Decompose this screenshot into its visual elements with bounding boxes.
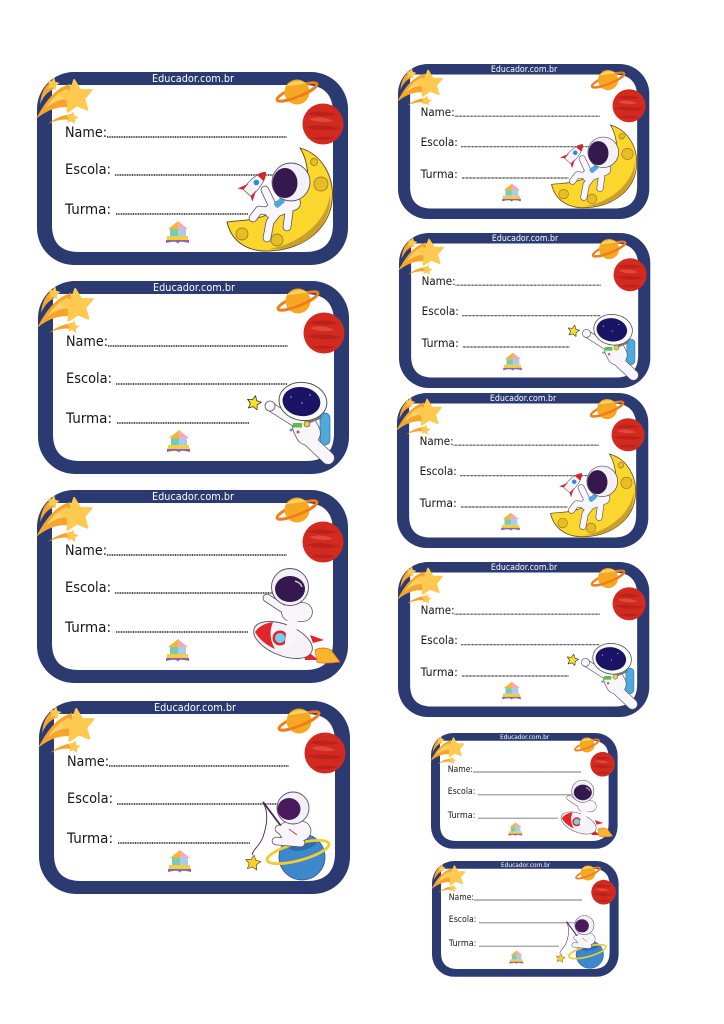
label card 6: star astronaut, medium [398, 233, 650, 388]
header: Educador.com.br [152, 73, 235, 85]
illustration: astronaut reaching for star [566, 641, 634, 704]
illustration: astronaut on moon [551, 454, 636, 537]
label card 9: rocket astronaut, small [430, 733, 618, 849]
field: class: Turma: [448, 939, 476, 949]
field: name: Name: [422, 274, 456, 288]
header: Educador.com.br [501, 862, 551, 869]
field: school: Escola: [65, 580, 111, 596]
icon: logo [508, 822, 522, 836]
illustration: astronaut reaching for star [567, 312, 635, 375]
field: class: Turma: [447, 811, 475, 821]
illustration: astronaut on moon [552, 125, 637, 208]
label card 1: moon astronaut [36, 72, 348, 265]
field: class: Turma: [64, 202, 111, 218]
label card 3: rocket astronaut [36, 490, 348, 683]
illustration: astronaut riding rocket [248, 568, 340, 666]
icon: logo [166, 639, 189, 662]
icon: logo [166, 221, 189, 244]
field: school: Escola: [421, 633, 458, 647]
field: name: Name: [65, 125, 107, 141]
label card 7: moon astronaut, medium [396, 393, 648, 548]
icon: logo [168, 850, 191, 873]
field: class: Turma: [66, 831, 113, 847]
field: school: Escola: [448, 787, 475, 797]
field: name: Name: [448, 765, 473, 775]
field: school: Escola: [66, 371, 112, 387]
field: class: Turma: [420, 167, 458, 181]
label card 2: star astronaut [37, 281, 349, 474]
icon: logo [167, 430, 190, 453]
field: name: Name: [449, 893, 474, 903]
illustration: astronaut fishing a star [555, 916, 607, 968]
label card 5: moon astronaut, medium [397, 64, 649, 219]
field: school: Escola: [65, 162, 111, 178]
field: name: Name: [421, 603, 455, 617]
label card 10: fishing astronaut, small [431, 861, 619, 977]
icon: logo [502, 682, 521, 700]
field: class: Turma: [420, 665, 458, 679]
header: Educador.com.br [153, 282, 236, 294]
icon: logo [503, 353, 522, 371]
header: Educador.com.br [491, 64, 558, 74]
field: class: Turma: [421, 336, 459, 350]
header: Educador.com.br [500, 734, 550, 741]
field: class: Turma: [419, 496, 457, 510]
field: school: Escola: [449, 915, 476, 925]
illustration: astronaut fishing a star [245, 792, 331, 880]
icon: logo [502, 184, 521, 202]
icon: logo [509, 950, 523, 964]
field: name: Name: [420, 434, 454, 448]
field: school: Escola: [67, 791, 113, 807]
field: name: Name: [65, 543, 107, 559]
header: Educador.com.br [491, 562, 558, 572]
field: school: Escola: [420, 464, 457, 478]
illustration: astronaut reaching for star [246, 379, 330, 458]
label card 4: fishing astronaut [38, 701, 350, 894]
illustration: astronaut on moon [227, 148, 332, 251]
header: Educador.com.br [492, 233, 559, 243]
header: Educador.com.br [152, 491, 235, 503]
illustration: astronaut riding rocket [558, 780, 613, 839]
label card 8: star astronaut, medium [397, 562, 649, 717]
icon: logo [501, 513, 520, 531]
field: name: Name: [66, 334, 108, 350]
field: school: Escola: [422, 304, 459, 318]
field: class: Turma: [65, 411, 112, 427]
header: Educador.com.br [490, 393, 557, 403]
field: class: Turma: [64, 620, 111, 636]
header: Educador.com.br [154, 702, 237, 714]
field: name: Name: [67, 754, 109, 770]
field: school: Escola: [421, 135, 458, 149]
field: name: Name: [421, 105, 455, 119]
